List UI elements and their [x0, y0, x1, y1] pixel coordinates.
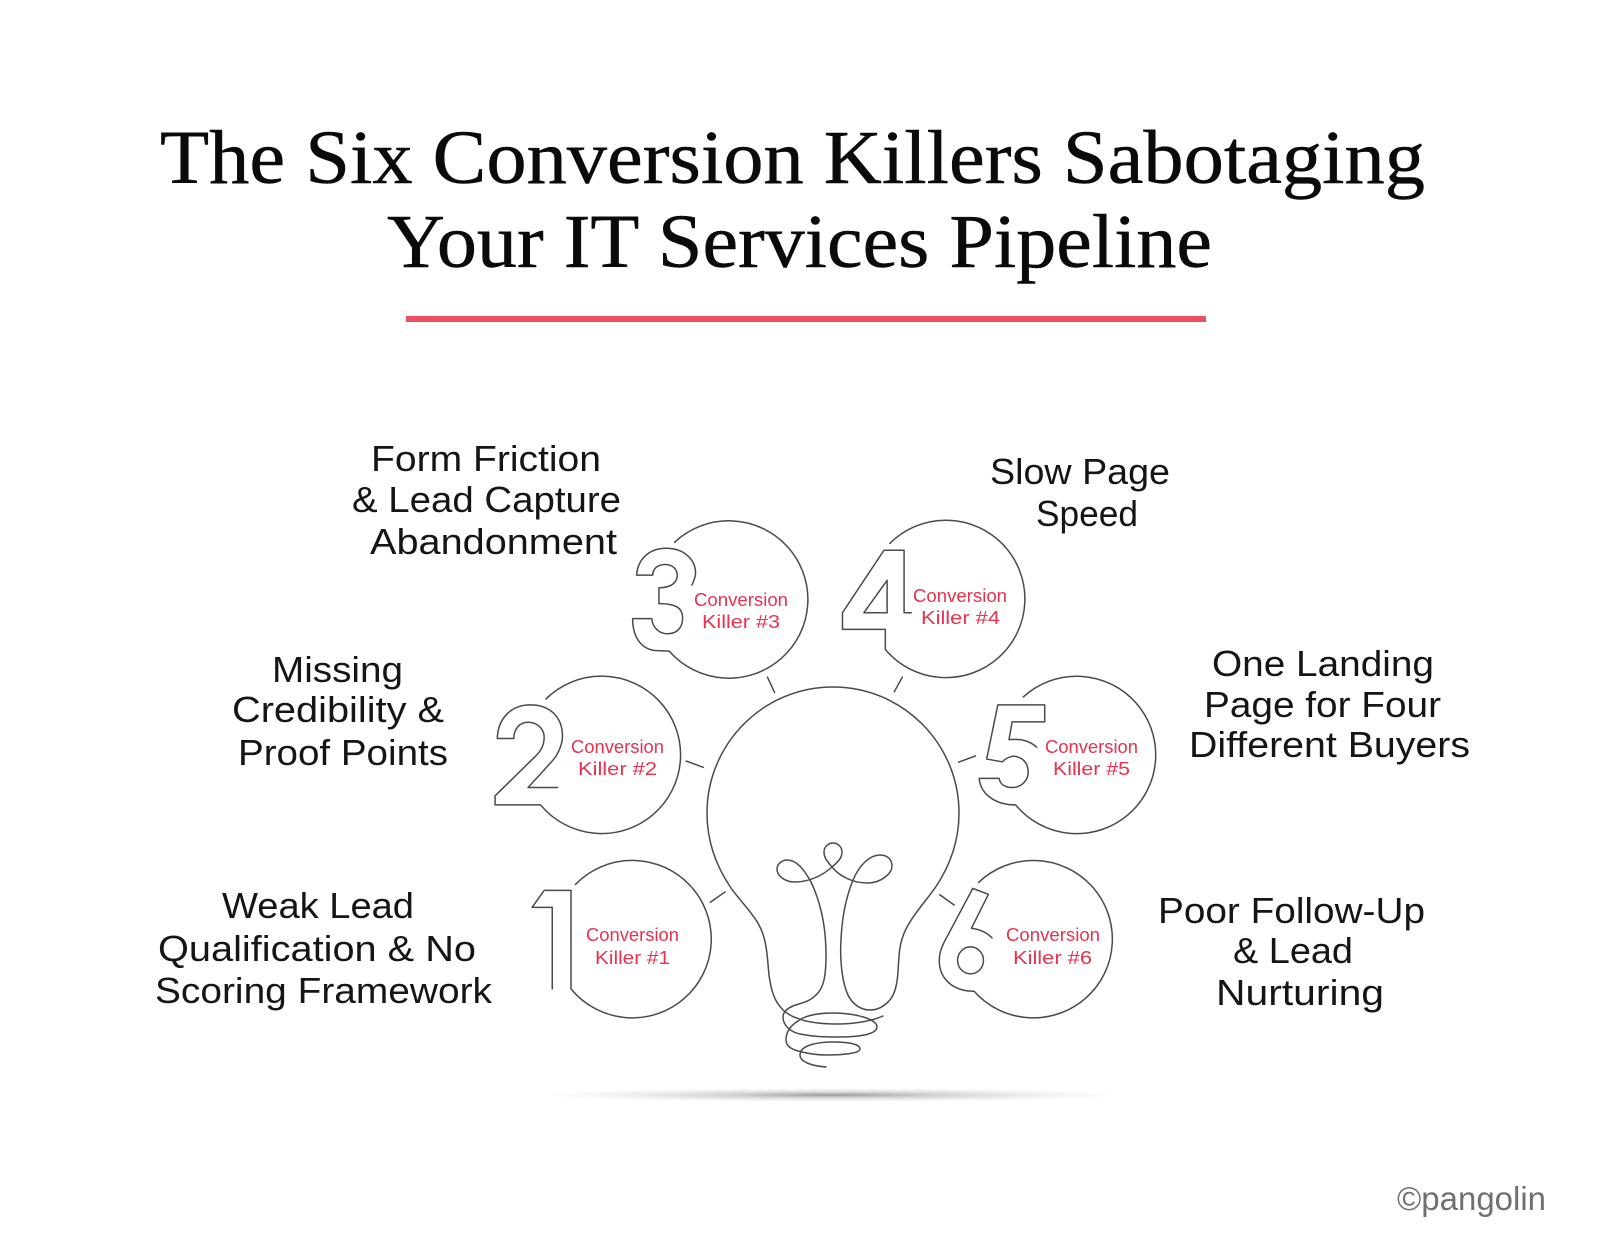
heading: poor follow-up: Nurturing — [1216, 972, 1384, 1013]
panel: conversion killer 2 — [495, 676, 681, 834]
connector ticks — [686, 677, 976, 905]
heading: one landing page: One Landing — [1212, 643, 1434, 684]
icon: numeral 3 bubble — [633, 521, 808, 678]
label: Conversion — [694, 590, 788, 610]
icon: numeral 6 bubble — [939, 860, 1112, 1018]
label — [1045, 737, 1138, 779]
panel: conversion killer 4 — [842, 520, 1025, 678]
label: Killer #4 — [921, 608, 1000, 628]
heading: poor follow-up: & Lead — [1233, 930, 1353, 971]
icon: numeral 4 bubble — [842, 520, 1025, 678]
title — [160, 116, 1425, 284]
heading: missing credibility: Missing — [272, 649, 403, 690]
heading: one landing page: Different Buyers — [1189, 724, 1470, 765]
panel: conversion killer 3 — [633, 521, 808, 678]
panel: conversion killer 1 — [532, 860, 711, 1018]
label: Conversion — [571, 737, 664, 757]
label — [571, 737, 664, 779]
heading: weak lead qualification: Scoring Framework — [155, 970, 493, 1011]
heading: slow page speed: Speed — [1036, 493, 1138, 534]
heading: slow page speed — [990, 451, 1170, 534]
label: Conversion — [1045, 737, 1138, 757]
heading: weak lead qualification — [155, 885, 493, 1011]
heading: weak lead qualification: Weak Lead — [222, 885, 414, 926]
label — [586, 925, 679, 968]
panel: conversion killer 6 — [939, 860, 1112, 1018]
title: Your IT Services Pipeline — [387, 200, 1212, 284]
heading: missing credibility: Proof Points — [238, 732, 448, 773]
label: Killer #3 — [702, 612, 780, 632]
icon: numeral 2 bubble — [495, 676, 681, 834]
label — [913, 586, 1007, 628]
label: Conversion — [1006, 925, 1100, 945]
label: Killer #1 — [595, 948, 670, 968]
heading: poor follow-up — [1158, 890, 1425, 1013]
label: Killer #6 — [1013, 948, 1092, 968]
label: Killer #2 — [578, 759, 657, 779]
label: Killer #5 — [1053, 759, 1130, 779]
label — [1006, 925, 1100, 968]
heading: poor follow-up: Poor Follow-Up — [1158, 890, 1425, 931]
heading: slow page speed: Slow Page — [990, 451, 1170, 492]
heading: weak lead qualification: Qualification & No — [158, 928, 476, 969]
heading: form friction — [352, 438, 621, 562]
icon: numeral 1 bubble — [532, 860, 711, 1018]
icon: light bulb — [707, 687, 959, 1067]
panel: conversion killer 5 — [979, 676, 1156, 834]
label — [694, 590, 788, 632]
heading: form friction: Form Friction — [371, 438, 601, 479]
heading: form friction: Abandonment — [370, 521, 617, 562]
title: The Six Conversion Killers Sabotaging — [160, 116, 1425, 200]
title underline — [406, 316, 1206, 322]
heading: missing credibility — [232, 649, 448, 773]
heading: missing credibility: Credibility & — [232, 689, 444, 730]
label: Conversion — [913, 586, 1007, 606]
heading: form friction: & Lead Capture — [352, 479, 621, 520]
heading: one landing page — [1189, 643, 1470, 765]
icon: numeral 5 bubble — [979, 676, 1156, 834]
label: Conversion — [586, 925, 679, 945]
heading: one landing page: Page for Four — [1204, 684, 1441, 725]
copyright: ©pangolin — [1397, 1180, 1546, 1217]
bulb ground shadow — [543, 1088, 1123, 1102]
